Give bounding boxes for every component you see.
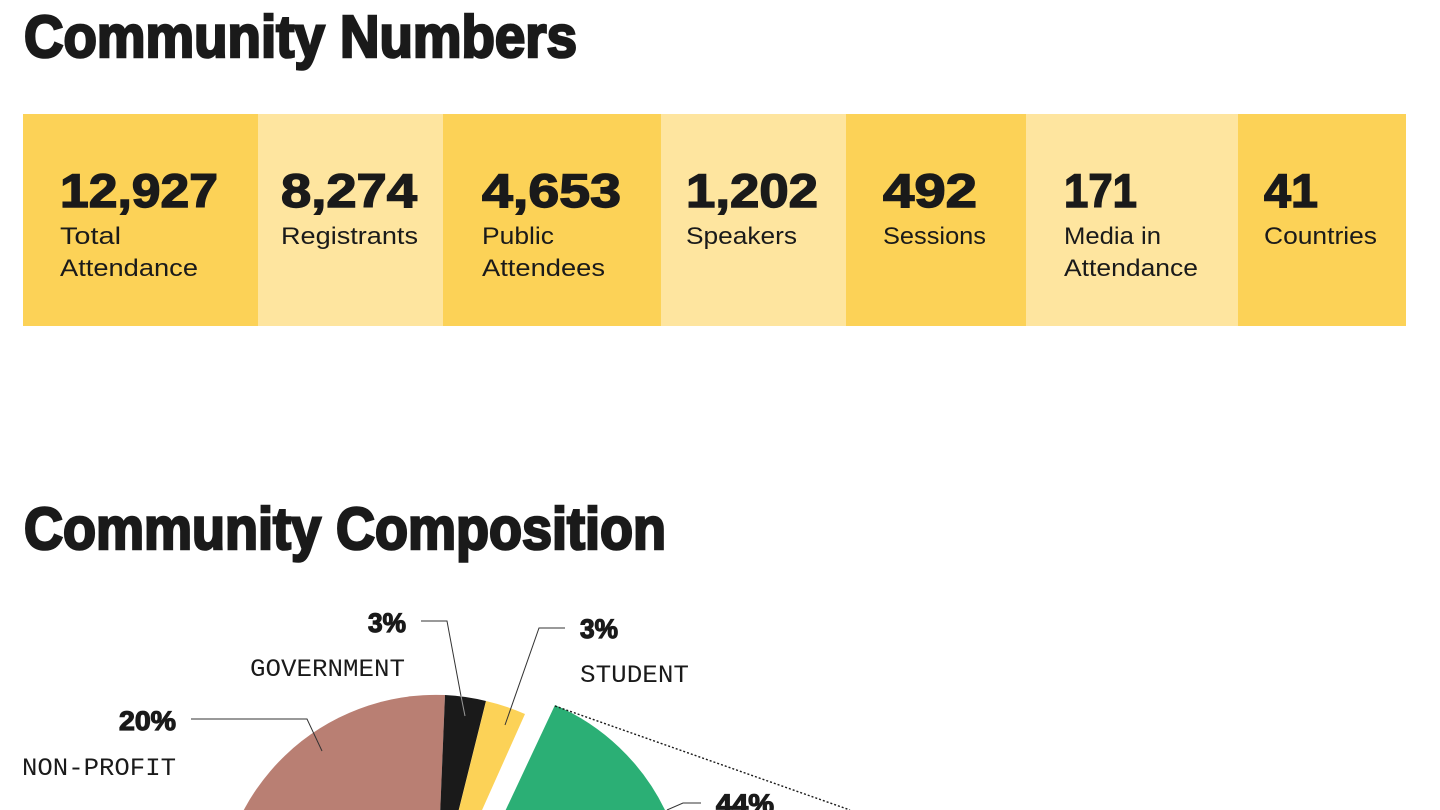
stat: sessions: 492 (883, 164, 977, 217)
heading: Community Composition: Community Composition (24, 496, 666, 562)
stat: countries: Countries (1264, 223, 1377, 250)
stat: media in attendance: Attendance (1064, 255, 1198, 282)
stat: public attendees: Attendees (482, 255, 605, 282)
stat: speakers (661, 114, 846, 326)
stat: public attendees: 4,653 (482, 164, 621, 217)
stat: countries: 41 (1264, 164, 1318, 217)
stat: total attendance (23, 114, 258, 326)
stat: public attendees: Public (482, 223, 554, 250)
callout: student 3% (505, 614, 689, 725)
slice: government (433, 695, 486, 810)
stat: speakers: Speakers (686, 223, 797, 250)
heading: Community Numbers: Community Numbers (24, 4, 577, 70)
stat: sessions: Sessions (883, 223, 986, 250)
stat: countries (1238, 114, 1406, 326)
callout: non-profit 20% (22, 706, 322, 783)
stat: registrants: Registrants (281, 223, 418, 250)
callout: non-profit 20%: 20% (119, 706, 176, 736)
stat: total attendance: Attendance (60, 255, 198, 282)
stat: registrants: 8,274 (281, 164, 417, 217)
stat: total attendance: 12,927 (60, 164, 218, 217)
callout: green segment 44% (667, 789, 774, 810)
stat: registrants (258, 114, 443, 326)
stat: media in attendance (1026, 114, 1238, 326)
callout: government 3%: GOVERNMENT (250, 655, 405, 684)
callout: government 3%: 3% (368, 608, 406, 638)
slice: student (433, 701, 525, 810)
stat: media in attendance: Media in (1064, 223, 1161, 250)
stat: media in attendance: 171 (1064, 164, 1137, 217)
panel: community statistics strip (23, 114, 1406, 326)
chart: community composition pie (22, 608, 850, 810)
callout: student 3%: 3% (580, 614, 618, 644)
dotted connector from green slice (555, 706, 850, 810)
stat: public attendees (443, 114, 661, 326)
callout: student 3%: STUDENT (580, 661, 689, 690)
stat: total attendance: Total (60, 223, 121, 250)
stat: sessions (846, 114, 1026, 326)
slice: non-profit (218, 695, 445, 810)
stat: speakers: 1,202 (686, 164, 818, 217)
callout: non-profit 20%: NON-PROFIT (22, 754, 176, 783)
slice: exploded green segment (462, 705, 680, 810)
callout: government 3% (250, 608, 465, 716)
